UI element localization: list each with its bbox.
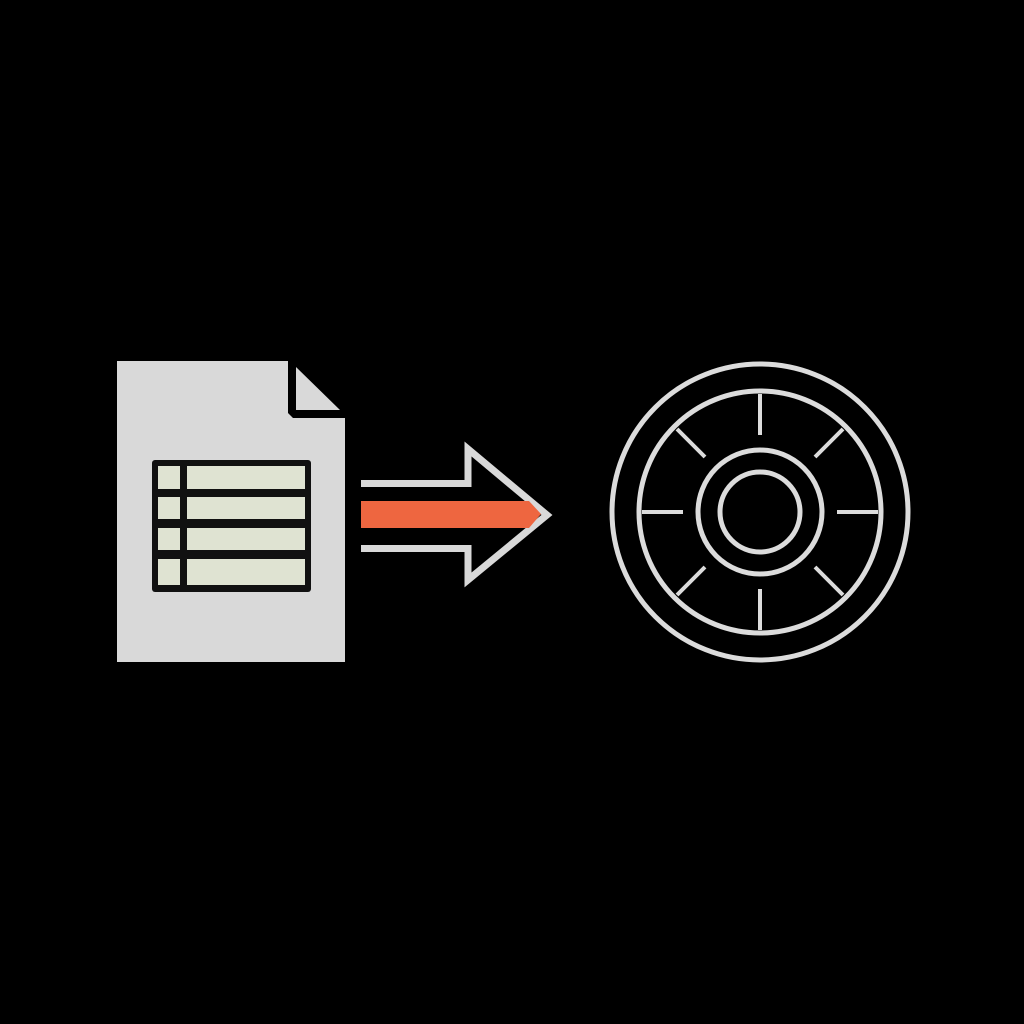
arrow — [361, 449, 547, 580]
icon: dial / disc — [612, 364, 908, 660]
icon: spreadsheet document — [117, 361, 345, 662]
